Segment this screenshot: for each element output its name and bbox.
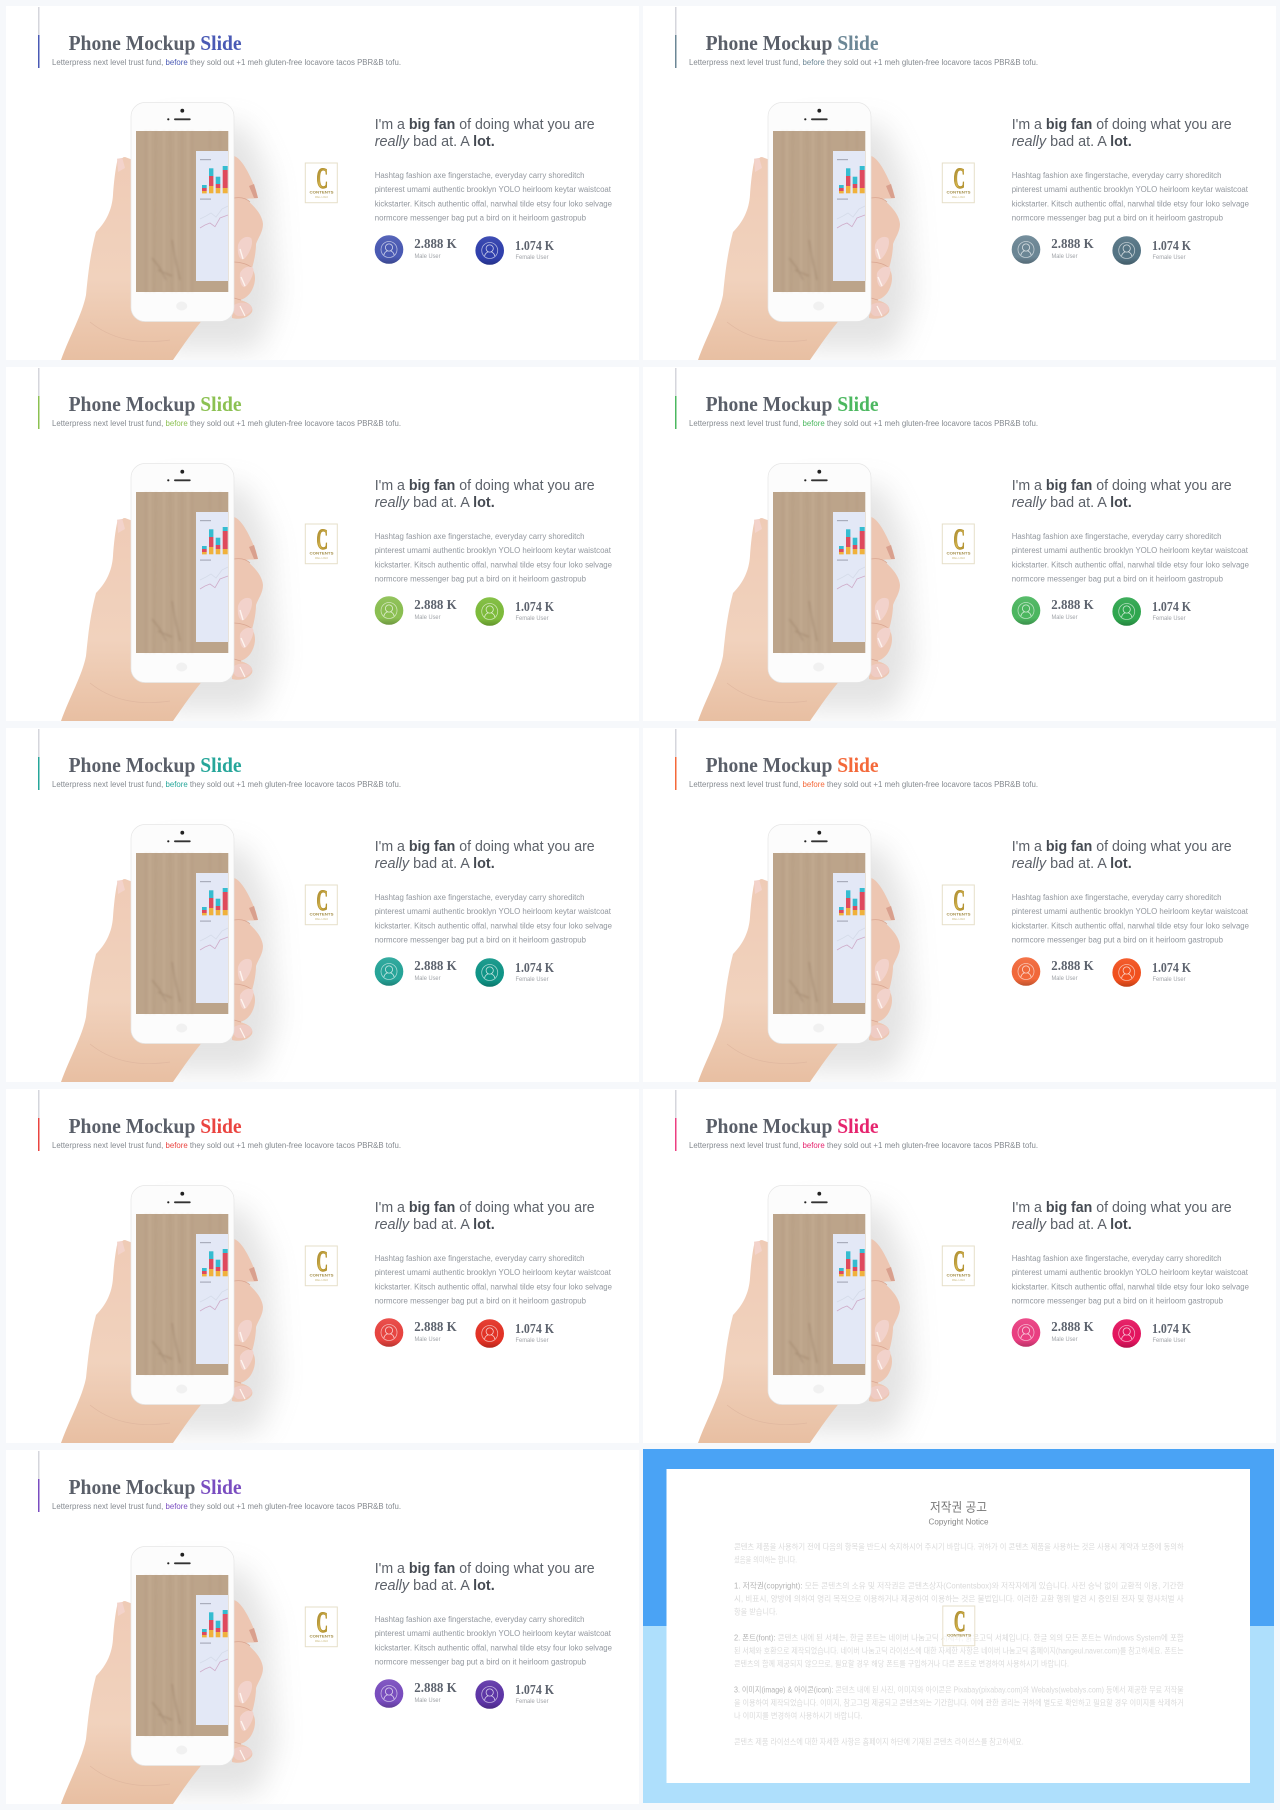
- body text: pinterest umami authentic brooklyn YOLO heirloom keytar waistcoat: [1012, 185, 1249, 194]
- stat: male user: 2.888 K: [1051, 1320, 1094, 1335]
- stat: female user: 1.074 K: [515, 961, 554, 976]
- body text: Hashtag fashion axe fingerstache, everyday carry shoreditch: [375, 893, 584, 902]
- body text: kickstarter. Kitsch authentic offal, narwhal tilde etsy four loko selvage: [375, 1282, 613, 1292]
- phone in hand with wood and chart screen: [698, 1186, 913, 1443]
- stat: male user: Male User: [1052, 615, 1078, 621]
- stat: male user: [375, 596, 457, 625]
- body text: [375, 532, 613, 584]
- headline line two: really bad at. A lot.: [375, 495, 495, 511]
- logo: C: [954, 523, 965, 556]
- subtitle: Letterpress next level trust fund, before they sold out +1 meh gluten-free locavore tacos PBR&B tofu.: [689, 780, 1038, 789]
- body text: normcore messenger bag put a bird on it heirloom gastropub: [375, 214, 587, 222]
- stat: female user: Female User: [516, 616, 548, 622]
- body text: [375, 171, 613, 222]
- phone in hand with wood and chart screen: [61, 824, 276, 1082]
- logo: MALL LOGO: [315, 917, 328, 921]
- panel: phone mockup slide, green: [643, 367, 1276, 721]
- headline: I'm a big fan of doing what you are: [375, 1561, 595, 1577]
- body text: normcore messenger bag put a bird on it heirloom gastropub: [1012, 1296, 1224, 1306]
- stat: female user: 1.074 K: [515, 1322, 554, 1337]
- logo: CONTENTS: [310, 1634, 334, 1638]
- stat: female user: Female User: [1152, 1338, 1186, 1344]
- stat: male user: 2.888 K: [414, 237, 457, 252]
- logo watermark: CONTENTS: [947, 1632, 971, 1638]
- accent bar: [38, 7, 40, 68]
- headline line two: really bad at. A lot.: [375, 856, 495, 872]
- logo: MALL LOGO: [315, 1639, 328, 1643]
- logo: MALL LOGO: [315, 556, 328, 560]
- logo: MALL LOGO: [315, 1278, 328, 1282]
- accent bar: [675, 368, 676, 429]
- notice body text: 1. 저작권(copyright): 모든 콘텐츠의 소유 및 저작권은 콘텐츠상자(Contentsbox)와 저작자에게 있습니다. 사전 승낙 없이 교환적 이용, 기간한: [734, 1581, 1184, 1591]
- notice body text: 콘텐츠의 함께 제공되지 않으므로, 필요할 경우 해당 폰트를 구입하거나 다른 폰트로 변경하여 사용하시기 바랍니다.: [734, 1658, 1069, 1668]
- subtitle: Letterpress next level trust fund, before they sold out +1 meh gluten-free locavore tacos PBR&B tofu.: [689, 58, 1038, 67]
- phone in hand with wood and chart screen: [61, 1546, 276, 1804]
- panel: phone mockup slide, pink: [643, 1089, 1276, 1443]
- stat: male user: [375, 957, 457, 986]
- logo: MALL LOGO: [952, 556, 965, 560]
- panel: phone mockup slide, purple: [6, 1450, 639, 1804]
- stat: male user: [1012, 596, 1094, 625]
- stat: female user: Female User: [516, 977, 548, 983]
- stat: male user: 2.888 K: [414, 1320, 457, 1335]
- headline: I'm a big fan of doing what you are: [1012, 117, 1232, 133]
- stat: female user: [1112, 236, 1191, 265]
- headline line two: really bad at. A lot.: [1012, 495, 1132, 511]
- stat: male user: Male User: [1052, 1337, 1078, 1343]
- logo: MALL LOGO: [952, 195, 965, 199]
- heading: Phone Mockup Slide: [69, 1114, 242, 1138]
- logo: C: [954, 162, 965, 195]
- logo watermark: [943, 1605, 975, 1646]
- logo: [942, 523, 974, 564]
- headline: I'm a big fan of doing what you are: [1012, 1200, 1232, 1216]
- stat: male user: [1012, 1318, 1094, 1347]
- phone in hand with wood and chart screen: [698, 102, 913, 360]
- stat: male user: [1012, 235, 1094, 264]
- logo: CONTENTS: [946, 912, 971, 916]
- subtitle: Letterpress next level trust fund, before they sold out +1 meh gluten-free locavore tacos PBR&B tofu.: [689, 419, 1038, 428]
- stat: female user: Female User: [516, 1338, 548, 1344]
- body text: pinterest umami authentic brooklyn YOLO heirloom keytar waistcoat: [1012, 907, 1249, 916]
- notice body text: 항을 받습니다.: [734, 1607, 778, 1617]
- phone in hand with wood and chart screen: [61, 102, 276, 360]
- stat: male user: Male User: [414, 1698, 440, 1704]
- stat: female user: [475, 1319, 554, 1348]
- stat: female user: [475, 597, 554, 626]
- headline line two: really bad at. A lot.: [1012, 1217, 1132, 1233]
- logo: C: [954, 884, 965, 917]
- body text: pinterest umami authentic brooklyn YOLO heirloom keytar waistcoat: [375, 1629, 612, 1638]
- stat: male user: [375, 1679, 457, 1708]
- body text: pinterest umami authentic brooklyn YOLO heirloom keytar waistcoat: [375, 546, 612, 555]
- logo: [305, 884, 337, 925]
- stat: female user: Female User: [1152, 977, 1186, 983]
- stat: male user: 2.888 K: [1051, 598, 1094, 613]
- headline: I'm a big fan of doing what you are: [375, 117, 595, 133]
- blue frame bottom: [643, 1626, 1274, 1803]
- body text: pinterest umami authentic brooklyn YOLO heirloom keytar waistcoat: [375, 907, 612, 916]
- logo: C: [316, 1606, 328, 1639]
- heading: Phone Mockup Slide: [69, 392, 242, 416]
- body text: normcore messenger bag put a bird on it heirloom gastropub: [375, 574, 587, 584]
- body text: kickstarter. Kitsch authentic offal, narwhal tilde etsy four loko selvage: [375, 200, 613, 208]
- body text: [375, 1615, 613, 1666]
- stat: female user: Female User: [516, 1699, 548, 1705]
- body text: kickstarter. Kitsch authentic offal, narwhal tilde etsy four loko selvage: [1012, 922, 1250, 930]
- panel: phone mockup slide, orange: [643, 728, 1276, 1082]
- logo: CONTENTS: [310, 190, 334, 194]
- stat: male user: [375, 235, 457, 264]
- stat: male user: 2.888 K: [414, 598, 457, 613]
- body text: Hashtag fashion axe fingerstache, everyday carry shoreditch: [375, 532, 584, 541]
- headline: I'm a big fan of doing what you are: [375, 478, 595, 494]
- stat: female user: Female User: [516, 255, 548, 261]
- body text: [375, 1254, 613, 1306]
- body text: kickstarter. Kitsch authentic offal, narwhal tilde etsy four loko selvage: [375, 1644, 613, 1652]
- body text: Hashtag fashion axe fingerstache, everyday carry shoreditch: [1012, 1254, 1222, 1263]
- stat: male user: Male User: [1052, 254, 1078, 260]
- subtitle: Letterpress next level trust fund, before they sold out +1 meh gluten-free locavore tacos PBR&B tofu.: [52, 780, 401, 789]
- logo: C: [954, 1245, 965, 1278]
- logo: [305, 1606, 337, 1647]
- stat: male user: [1012, 957, 1094, 986]
- notice body text: 시, 비표시, 양방에 의하여 영리 목적으로 이용하거나 제공하여 이용하는 것은 불법입니다. 이러한 교환 행위 발견 시 증인된 전자 및 형사처벌 사: [734, 1593, 1184, 1603]
- logo: CONTENTS: [310, 1272, 334, 1278]
- logo: C: [316, 523, 328, 556]
- accent bar: [675, 729, 676, 790]
- headline: I'm a big fan of doing what you are: [1012, 839, 1232, 855]
- notice body text: 2. 폰트(font): 콘텐츠 내에 된 서체는, 한글 폰트는 네이버 나눔고딕 서체와, 맑은고딕 서체입니다. 한글 외의 모든 폰트는 Windows System에 포함: [734, 1633, 1184, 1643]
- panel: phone mockup slide, lime: [6, 367, 639, 721]
- logo: [942, 884, 974, 925]
- headline line two: really bad at. A lot.: [375, 134, 495, 150]
- body text: normcore messenger bag put a bird on it heirloom gastropub: [375, 936, 587, 944]
- body text: kickstarter. Kitsch authentic offal, narwhal tilde etsy four loko selvage: [1012, 560, 1250, 570]
- stat: male user: Male User: [414, 1337, 440, 1343]
- logo: [305, 1245, 337, 1286]
- stat: female user: 1.074 K: [515, 239, 554, 254]
- body text: pinterest umami authentic brooklyn YOLO heirloom keytar waistcoat: [1012, 1268, 1249, 1277]
- body text: [1012, 893, 1250, 944]
- accent bar: [38, 729, 40, 790]
- logo: CONTENTS: [310, 912, 334, 916]
- stat: female user: [475, 1680, 554, 1709]
- accent bar: [675, 7, 676, 68]
- body text: Hashtag fashion axe fingerstache, everyday carry shoreditch: [375, 1615, 584, 1624]
- accent bar: [675, 1090, 676, 1151]
- body text: pinterest umami authentic brooklyn YOLO heirloom keytar waistcoat: [375, 185, 612, 194]
- body text: Hashtag fashion axe fingerstache, everyday carry shoreditch: [1012, 893, 1222, 902]
- body text: kickstarter. Kitsch authentic offal, narwhal tilde etsy four loko selvage: [375, 560, 613, 570]
- body text: normcore messenger bag put a bird on it heirloom gastropub: [1012, 214, 1224, 222]
- phone in hand with wood and chart screen: [61, 1186, 276, 1443]
- logo: MALL LOGO: [952, 917, 965, 921]
- notice subheading: Copyright Notice: [928, 1517, 989, 1527]
- body text: normcore messenger bag put a bird on it heirloom gastropub: [375, 1658, 587, 1666]
- stat: female user: 1.074 K: [515, 1683, 554, 1698]
- headline: I'm a big fan of doing what you are: [1012, 478, 1232, 494]
- body text: [1012, 1254, 1250, 1306]
- logo: CONTENTS: [310, 550, 334, 556]
- subtitle: Letterpress next level trust fund, before they sold out +1 meh gluten-free locavore tacos PBR&B tofu.: [52, 1502, 401, 1511]
- body text: Hashtag fashion axe fingerstache, everyday carry shoreditch: [375, 171, 584, 180]
- body text: Hashtag fashion axe fingerstache, everyday carry shoreditch: [1012, 532, 1222, 541]
- body text: normcore messenger bag put a bird on it heirloom gastropub: [375, 1296, 587, 1306]
- stat: male user: Male User: [414, 615, 440, 621]
- subtitle: Letterpress next level trust fund, before they sold out +1 meh gluten-free locavore tacos PBR&B tofu.: [52, 419, 401, 428]
- stat: female user: [475, 958, 554, 987]
- logo: [942, 1245, 974, 1286]
- body text: normcore messenger bag put a bird on it heirloom gastropub: [1012, 574, 1224, 584]
- heading: Phone Mockup Slide: [706, 753, 879, 777]
- stat: female user: 1.074 K: [515, 600, 554, 615]
- notice body text: 셨음을 의미하는 합니다.: [734, 1554, 797, 1564]
- body text: Hashtag fashion axe fingerstache, everyday carry shoreditch: [375, 1254, 584, 1263]
- body text: pinterest umami authentic brooklyn YOLO heirloom keytar waistcoat: [1012, 546, 1249, 555]
- stat: female user: [1112, 597, 1191, 626]
- stat: female user: 1.074 K: [1152, 961, 1191, 976]
- stat: female user: [1112, 1319, 1191, 1348]
- stat: male user: 2.888 K: [414, 1681, 457, 1696]
- stat: female user: 1.074 K: [1152, 239, 1191, 254]
- headline line two: really bad at. A lot.: [375, 1578, 495, 1594]
- headline line two: really bad at. A lot.: [1012, 134, 1132, 150]
- phone in hand with wood and chart screen: [698, 824, 913, 1082]
- stat: male user: Male User: [414, 976, 440, 982]
- logo: [305, 523, 337, 564]
- heading: Phone Mockup Slide: [706, 1114, 879, 1138]
- body text: normcore messenger bag put a bird on it heirloom gastropub: [1012, 936, 1224, 944]
- body text: [375, 893, 613, 944]
- headline line two: really bad at. A lot.: [1012, 856, 1132, 872]
- notice body text: 을 이용하여 제작되었습니다. 이미지, 참고그림 제공되고 콘텐츠와는 기간합니다. 이에 관한 권리는 귀하에 별도로 확인하고 필요할 경우 이미지를 삭제하거: [734, 1697, 1184, 1707]
- logo: C: [316, 162, 328, 195]
- logo: [305, 162, 337, 203]
- body text: [1012, 171, 1250, 222]
- panel: copyright notice: [643, 1449, 1274, 1803]
- headline: I'm a big fan of doing what you are: [375, 839, 595, 855]
- notice heading: 저작권 공고: [930, 1501, 987, 1515]
- logo: CONTENTS: [946, 550, 971, 556]
- stat: female user: 1.074 K: [1152, 1322, 1191, 1337]
- stat: male user: 2.888 K: [1051, 959, 1094, 974]
- heading: Phone Mockup Slide: [706, 392, 879, 416]
- heading: Phone Mockup Slide: [69, 31, 242, 55]
- logo: CONTENTS: [946, 1272, 971, 1278]
- panel: phone mockup slide, teal: [6, 728, 639, 1082]
- body text: [1012, 532, 1250, 584]
- subtitle: Letterpress next level trust fund, before they sold out +1 meh gluten-free locavore tacos PBR&B tofu.: [52, 1141, 401, 1150]
- heading: Phone Mockup Slide: [69, 753, 242, 777]
- blue frame top: [643, 1449, 1274, 1626]
- notice body text: [734, 1542, 1184, 1747]
- headline: I'm a big fan of doing what you are: [375, 1200, 595, 1216]
- logo: MALL LOGO: [952, 1278, 965, 1282]
- stat: male user: Male User: [1052, 976, 1078, 982]
- body text: kickstarter. Kitsch authentic offal, narwhal tilde etsy four loko selvage: [1012, 200, 1250, 208]
- subtitle: Letterpress next level trust fund, before they sold out +1 meh gluten-free locavore tacos PBR&B tofu.: [52, 58, 401, 67]
- notice body text: 콘텐츠 제품 라이선스에 대한 자세한 사항은 홈페이지 하단에 기재된 콘텐츠 라이선스를 참고하세요.: [734, 1737, 1024, 1747]
- stat: female user: Female User: [1152, 616, 1186, 622]
- notice body text: 나 이미지를 변경하여 사용하시기 바랍니다.: [734, 1710, 862, 1720]
- logo: CONTENTS: [946, 190, 971, 194]
- logo: C: [316, 884, 328, 917]
- panel: phone mockup slide, blue grey: [643, 6, 1276, 360]
- body text: Hashtag fashion axe fingerstache, everyday carry shoreditch: [1012, 171, 1222, 180]
- accent bar: [38, 1090, 40, 1151]
- stat: male user: 2.888 K: [1051, 237, 1094, 252]
- phone in hand with wood and chart screen: [61, 464, 276, 721]
- body text: kickstarter. Kitsch authentic offal, narwhal tilde etsy four loko selvage: [375, 922, 613, 930]
- subtitle: Letterpress next level trust fund, before they sold out +1 meh gluten-free locavore tacos PBR&B tofu.: [689, 1141, 1038, 1150]
- accent bar: [38, 368, 40, 429]
- stat: female user: [1112, 958, 1191, 987]
- heading: Phone Mockup Slide: [706, 31, 879, 55]
- white notice card: [666, 1469, 1250, 1783]
- stat: male user: [375, 1318, 457, 1347]
- logo: [942, 162, 974, 203]
- logo watermark: C: [954, 1605, 966, 1638]
- notice body text: 콘텐츠 제품을 사용하기 전에 다음의 항목을 반드시 숙지하시어 주시기 바랍니다. 귀하가 이 콘텐츠 제품을 사용하는 것은 사용시 계약과 보증에 동의하: [734, 1542, 1184, 1552]
- notice body text: 된 서체와 호환으로 제작되었습니다. 네이버 나눔고딕 라이선스에 대한 자세한 사항은 네이버 나눔고딕 홈페이지(hangeul.naver.com)를 참고하세요. 폰트는: [734, 1646, 1184, 1656]
- heading: Phone Mockup Slide: [69, 1475, 242, 1499]
- headline line two: really bad at. A lot.: [375, 1217, 495, 1233]
- notice body text: 3. 이미지(image) & 아이콘(icon): 콘텐츠 내에 된 사진, 이미지와 아이콘은 Pixabay(pixabay.com)와 Webalys(webalys.com) 등에서 제공한 무료 저작물: [734, 1684, 1184, 1694]
- stat: female user: [475, 236, 554, 265]
- stat: female user: 1.074 K: [1152, 600, 1191, 615]
- stat: male user: 2.888 K: [414, 959, 457, 974]
- body text: kickstarter. Kitsch authentic offal, narwhal tilde etsy four loko selvage: [1012, 1282, 1250, 1292]
- logo: MALL LOGO: [315, 195, 328, 199]
- stat: male user: Male User: [414, 254, 440, 260]
- body text: pinterest umami authentic brooklyn YOLO heirloom keytar waistcoat: [375, 1268, 612, 1277]
- panel: phone mockup slide, indigo: [6, 6, 639, 360]
- panel: phone mockup slide, red: [6, 1089, 639, 1443]
- phone in hand with wood and chart screen: [698, 464, 913, 721]
- stat: female user: Female User: [1152, 255, 1186, 261]
- accent bar: [38, 1451, 40, 1512]
- logo: C: [316, 1245, 328, 1278]
